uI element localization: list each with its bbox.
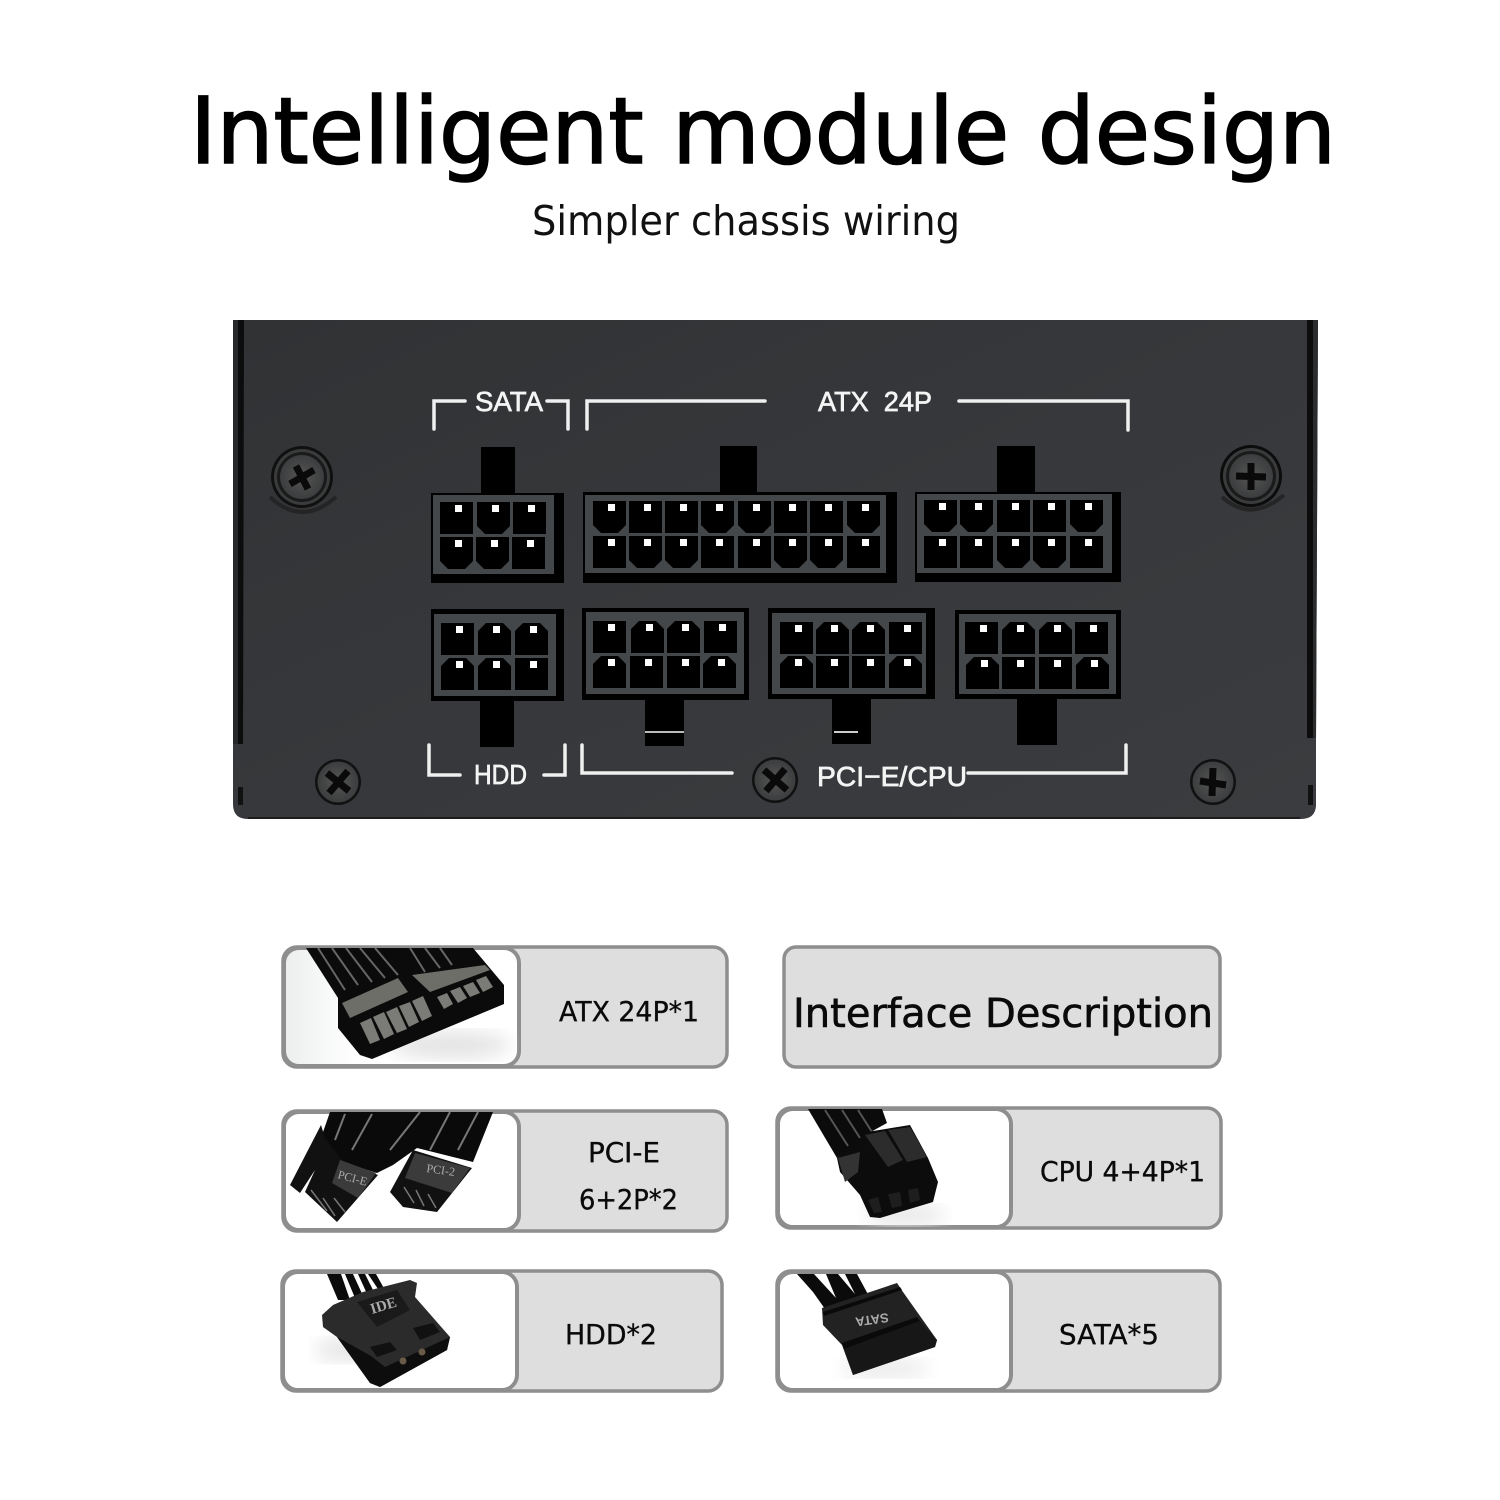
label: PCI-E 6+2P*2: PCI-E: [588, 1136, 660, 1169]
connector: PCI-E/CPU socket 1: [582, 608, 749, 746]
label: ATX 24P*1: ATX 24P*1: [559, 995, 699, 1028]
card: Interface Description: [784, 947, 1220, 1067]
label: PCI-E 6+2P*2: [579, 1136, 678, 1216]
icon: IDE/Molex connector: IDE: [368, 1295, 399, 1318]
icon: IDE/Molex connector: [315, 1274, 450, 1387]
chassis body: [233, 320, 1318, 819]
label: ATX 24P bracket: ATX 24P: [818, 386, 932, 417]
label: HDD bracket: HDD: [474, 759, 527, 790]
icon: PCI-E connectors: [290, 1112, 493, 1222]
label: PCI-E/CPU bracket: PCI−E/CPU: [817, 761, 967, 792]
card: HDD: [282, 1271, 722, 1391]
label: SATA bracket: SATA: [475, 386, 543, 417]
label: CPU 4+4P*1: CPU 4+4P*1: [1040, 1155, 1205, 1188]
icon: SATA connector: SATA: [854, 1310, 890, 1330]
connector: PCI-E/CPU socket 2: [768, 608, 935, 744]
subtitle: Simpler chassis wiring: [532, 197, 960, 245]
card: ATX 24P: [283, 947, 727, 1067]
card: CPU 4+4P: [777, 1108, 1221, 1228]
icon: SATA connector: [797, 1274, 937, 1377]
label: SATA*5: SATA*5: [1059, 1318, 1159, 1351]
label: SATA bracket: [434, 386, 568, 429]
icon: screw lower left: [315, 759, 361, 805]
icon: screw upper right: [1220, 445, 1284, 510]
label: PCI-E/CPU bracket: [582, 745, 1126, 792]
label: HDD bracket: [429, 745, 565, 790]
icon: PCI-E connectors: PCI-2: [426, 1161, 456, 1179]
card: SATA: [777, 1271, 1220, 1391]
label: HDD*2: HDD*2: [565, 1318, 657, 1351]
icon: ATX 24-pin connector: [306, 948, 510, 1059]
panel: power supply modular back plate: [233, 320, 1318, 819]
icon: screw lower right: [1190, 759, 1236, 805]
icon: screw upper left: [270, 446, 336, 512]
connector: ATX 10-pin socket: [915, 446, 1121, 582]
card: Interface Description: Interface Description: [793, 991, 1213, 1037]
connector: HDD socket: [431, 609, 564, 747]
connector: SATA socket: [431, 447, 564, 583]
connector: ATX 16-pin socket: [583, 446, 897, 583]
icon: screw lower centre: [752, 757, 798, 803]
label: ATX 24P bracket: [587, 386, 1128, 430]
title: Intelligent module design: [190, 78, 1336, 185]
card: PCI-E 6+2P: [283, 1111, 727, 1231]
label: PCI-E 6+2P*2: 6+2P*2: [579, 1183, 678, 1216]
icon: CPU connector: [808, 1109, 945, 1225]
icon: PCI-E connectors: PCI-E: [336, 1167, 369, 1189]
connector: PCI-E/CPU socket 3: [955, 610, 1121, 745]
